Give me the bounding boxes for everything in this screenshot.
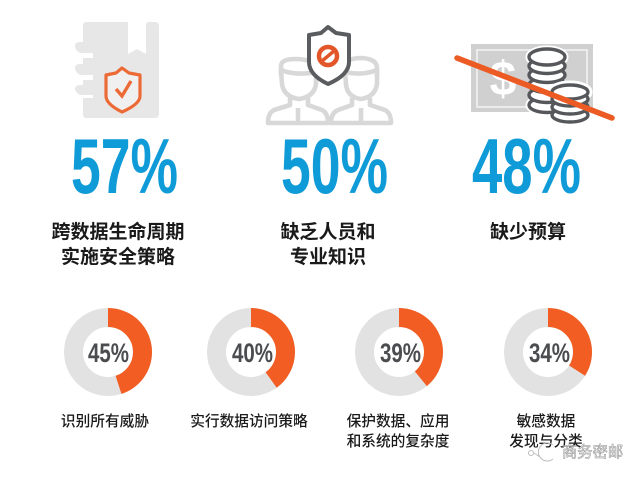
- strike line: [457, 58, 612, 118]
- donut: 45%: 45%: [88, 338, 129, 368]
- label: discovery: 敏感数据: [517, 413, 576, 430]
- label: lifecycle policy: 实施安全策略: [61, 245, 175, 268]
- label: complexity: 和系统的复杂度: [347, 432, 450, 450]
- label: lack of budget: 缺少预算: [490, 220, 566, 243]
- label: discovery: 发现与分类: [509, 433, 583, 450]
- left person: [268, 58, 391, 123]
- watermark: logo: [528, 443, 553, 461]
- label: access policy: 实行数据访问策略: [190, 412, 308, 430]
- donut: 40%: [216, 318, 286, 386]
- label: lack of staff: 缺乏人员和: [280, 221, 376, 243]
- donut: 34%: [514, 318, 582, 386]
- donut: 45%: [74, 318, 142, 386]
- donut: 34%: 34%: [529, 338, 570, 368]
- watermark: text: 商务密邮: [562, 444, 623, 461]
- label: identify threats: 识别所有威胁: [61, 413, 149, 430]
- dollar sign: $: [490, 53, 517, 106]
- donut: 40%: 40%: [232, 338, 273, 368]
- icon: notebook with shield: [75, 22, 159, 118]
- stat: 48%: 48%: [472, 122, 581, 210]
- donut: 39%: [364, 318, 434, 386]
- donut: 39%: 39%: [380, 338, 421, 368]
- label: complexity: 保护数据、应用: [347, 412, 449, 430]
- label: lack of staff: 专业知识: [290, 246, 366, 268]
- icon: money with coin stacks crossed out: [457, 44, 612, 122]
- label: lifecycle policy: 跨数据生命周期: [51, 220, 185, 243]
- icon: two people with shield: [268, 27, 391, 123]
- right person: [345, 58, 377, 76]
- stat: 50%: 50%: [281, 122, 388, 210]
- coin stack small: [551, 84, 589, 122]
- coin stack large: [529, 49, 565, 112]
- stat: 57%: 57%: [71, 122, 178, 210]
